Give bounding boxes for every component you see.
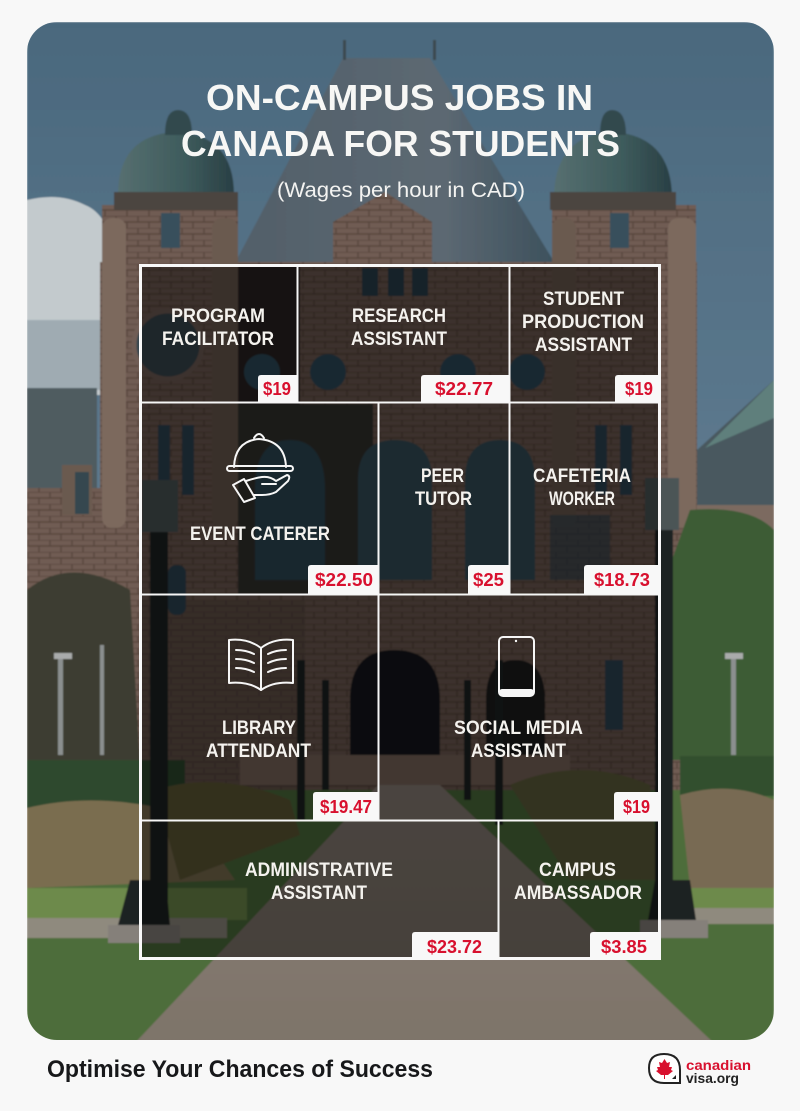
cell: social media assistant: ASSISTANT (471, 741, 566, 762)
icon: maple leaf badge (649, 1054, 680, 1083)
cell: program facilitator: PROGRAM (171, 306, 265, 327)
cell: administrative assistant: $23.72 (427, 937, 482, 957)
walkway (133, 785, 716, 1045)
title (181, 77, 620, 164)
cell: event caterer (190, 434, 378, 594)
central gable (333, 192, 432, 265)
cell: event caterer: $22.50 (315, 570, 373, 590)
logo: canadianvisa.org: canadian (686, 1057, 751, 1073)
cell: student production assistant: PRODUCTION (522, 312, 644, 333)
cell: cafeteria worker: CAFETERIA (533, 466, 631, 487)
cell: student production assistant: ASSISTANT (535, 335, 632, 356)
cell: research assistant: ASSISTANT (351, 329, 447, 350)
cell: administrative assistant: ASSISTANT (271, 883, 367, 904)
logo: canadianvisa.org: visa.org (686, 1070, 739, 1086)
cell: campus ambassador: $3.85 (601, 937, 647, 957)
cell: library attendant: LIBRARY (222, 718, 296, 739)
icon: open book (229, 640, 293, 690)
cell: administrative assistant (245, 860, 498, 960)
cell: research assistant: $22.77 (435, 379, 493, 399)
windows and arches (134, 311, 202, 379)
cell: event caterer: EVENT CATERER (190, 524, 330, 545)
cell: cafeteria worker: WORKER (549, 489, 615, 510)
cell: cafeteria worker (533, 466, 661, 594)
cell: program facilitator (162, 306, 297, 402)
trees (666, 509, 774, 760)
cell: research assistant: RESEARCH (352, 306, 446, 327)
icon: smartphone (499, 637, 534, 696)
ground (27, 790, 774, 1045)
grid lines (140, 265, 660, 958)
cell: peer tutor (415, 466, 509, 594)
logo: canadianvisa.org (649, 1054, 751, 1086)
footer tagline: Optimise Your Chances of Success (47, 1056, 433, 1083)
cell: peer tutor: PEER (421, 466, 464, 487)
cell: campus ambassador: CAMPUS (539, 860, 616, 881)
cell: library attendant: ATTENDANT (206, 741, 311, 762)
cell: campus ambassador (514, 860, 661, 960)
cell: peer tutor: $25 (473, 570, 504, 590)
subtitle: (Wages per hour in CAD) (277, 179, 525, 202)
cell: research assistant (351, 306, 509, 402)
cell: administrative assistant: ADMINISTRATIVE (245, 860, 393, 881)
cell: social media assistant: SOCIAL MEDIA (454, 718, 583, 739)
cell: program facilitator: $19 (263, 379, 291, 399)
lamp posts (150, 530, 168, 900)
cell: library attendant: $19.47 (320, 797, 372, 817)
title: CANADA FOR STUDENTS (181, 123, 620, 164)
cell: program facilitator: FACILITATOR (162, 329, 274, 350)
dark recesses (238, 264, 300, 404)
cell: student production assistant: $19 (625, 379, 653, 399)
cell: social media assistant (454, 637, 661, 820)
cell: peer tutor: TUTOR (415, 489, 472, 510)
cell: library attendant (206, 640, 378, 820)
cell: cafeteria worker: $18.73 (594, 570, 650, 590)
cell: student production assistant: STUDENT (543, 289, 624, 310)
grid darkening overlay (139, 264, 661, 960)
icon: cloche on hand (227, 434, 293, 502)
towers (101, 204, 238, 263)
cell: social media assistant: $19 (623, 797, 650, 817)
title: ON-CAMPUS JOBS IN (206, 77, 593, 118)
entrance arch (350, 650, 440, 760)
job grid (140, 265, 661, 960)
cell: campus ambassador: AMBASSADOR (514, 883, 642, 904)
cell: student production assistant (522, 289, 661, 402)
